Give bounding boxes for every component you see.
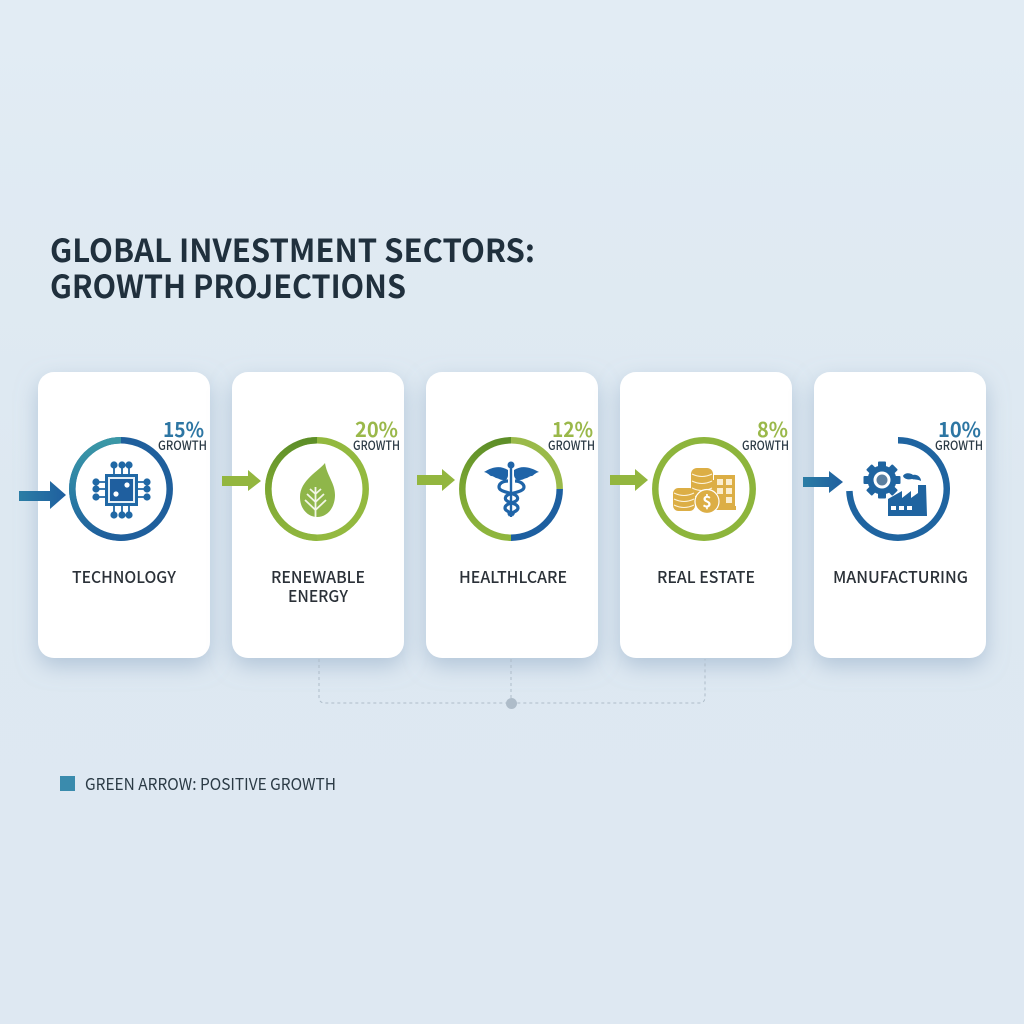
card background (232, 372, 404, 658)
label: healthcare: HEALTHLCARE (459, 564, 567, 588)
icon: gear and factory (864, 462, 927, 516)
growth value: 20%: 20% (355, 413, 398, 443)
label: real estate: REAL ESTATE (657, 564, 755, 588)
panel: manufacturing (803, 372, 986, 658)
label: renewable energy: RENEWABLE (271, 564, 365, 588)
legend text: GREEN ARROW: POSITIVE GROWTH (85, 771, 336, 795)
arrow: real estate (610, 469, 648, 491)
growth value: 20%: GROWTH (353, 435, 400, 454)
gear (864, 462, 900, 498)
card background (38, 372, 210, 658)
title: GLOBAL INVESTMENT SECTORS: (50, 226, 535, 272)
icon: caduceus (484, 462, 539, 517)
left stack (673, 488, 695, 511)
ring: real estate (655, 440, 753, 538)
growth value: 12%: GROWTH (548, 435, 595, 454)
growth value: 20% (353, 413, 400, 454)
arrow: healthcare (417, 469, 455, 491)
growth value: 8% (742, 413, 789, 454)
arrow: manufacturing (803, 471, 843, 493)
growth value: 15%: 15% (163, 413, 204, 443)
icon: leaf (300, 463, 335, 517)
panel: healthcare (417, 372, 598, 658)
growth value: 10%: 10% (938, 413, 981, 443)
card background (426, 372, 598, 658)
growth value: 8%: 8% (757, 413, 788, 443)
icon: coins and building: $ (702, 488, 712, 512)
icon: coins and building (673, 468, 736, 514)
label: manufacturing: MANUFACTURING (833, 564, 968, 588)
factory (888, 485, 927, 516)
legend (60, 771, 336, 795)
growth value: 8%: GROWTH (742, 435, 789, 454)
smoke (903, 473, 921, 481)
label: renewable energy (271, 564, 365, 607)
card background (814, 372, 986, 658)
label: technology: TECHNOLOGY (72, 564, 177, 588)
ring: manufacturing (849, 440, 947, 538)
growth value: 12% (548, 413, 595, 454)
growth value: 10%: GROWTH (935, 435, 983, 454)
growth value: 12%: 12% (552, 413, 593, 443)
panel: real estate (610, 372, 792, 658)
title (50, 226, 535, 308)
icon: microchip (93, 462, 150, 518)
middle stack (691, 468, 713, 502)
dollar coin (695, 490, 719, 514)
growth value: 10% (935, 413, 983, 454)
panel: renewable energy (222, 372, 404, 658)
panel: technology (19, 372, 210, 658)
growth value: 15% (158, 413, 207, 454)
label: renewable energy: ENERGY (288, 583, 349, 607)
ring: renewable energy (268, 440, 366, 538)
building (708, 475, 736, 510)
ring: technology (72, 440, 170, 538)
legend swatch (60, 776, 75, 791)
connector: dashed bracket (319, 659, 705, 709)
ring: healthcare (462, 440, 560, 538)
growth value: 15%: GROWTH (158, 435, 207, 454)
card background (620, 372, 792, 658)
arrow: technology (19, 481, 66, 509)
arrow: renewable energy (222, 470, 261, 491)
title: GROWTH PROJECTIONS (50, 262, 406, 308)
